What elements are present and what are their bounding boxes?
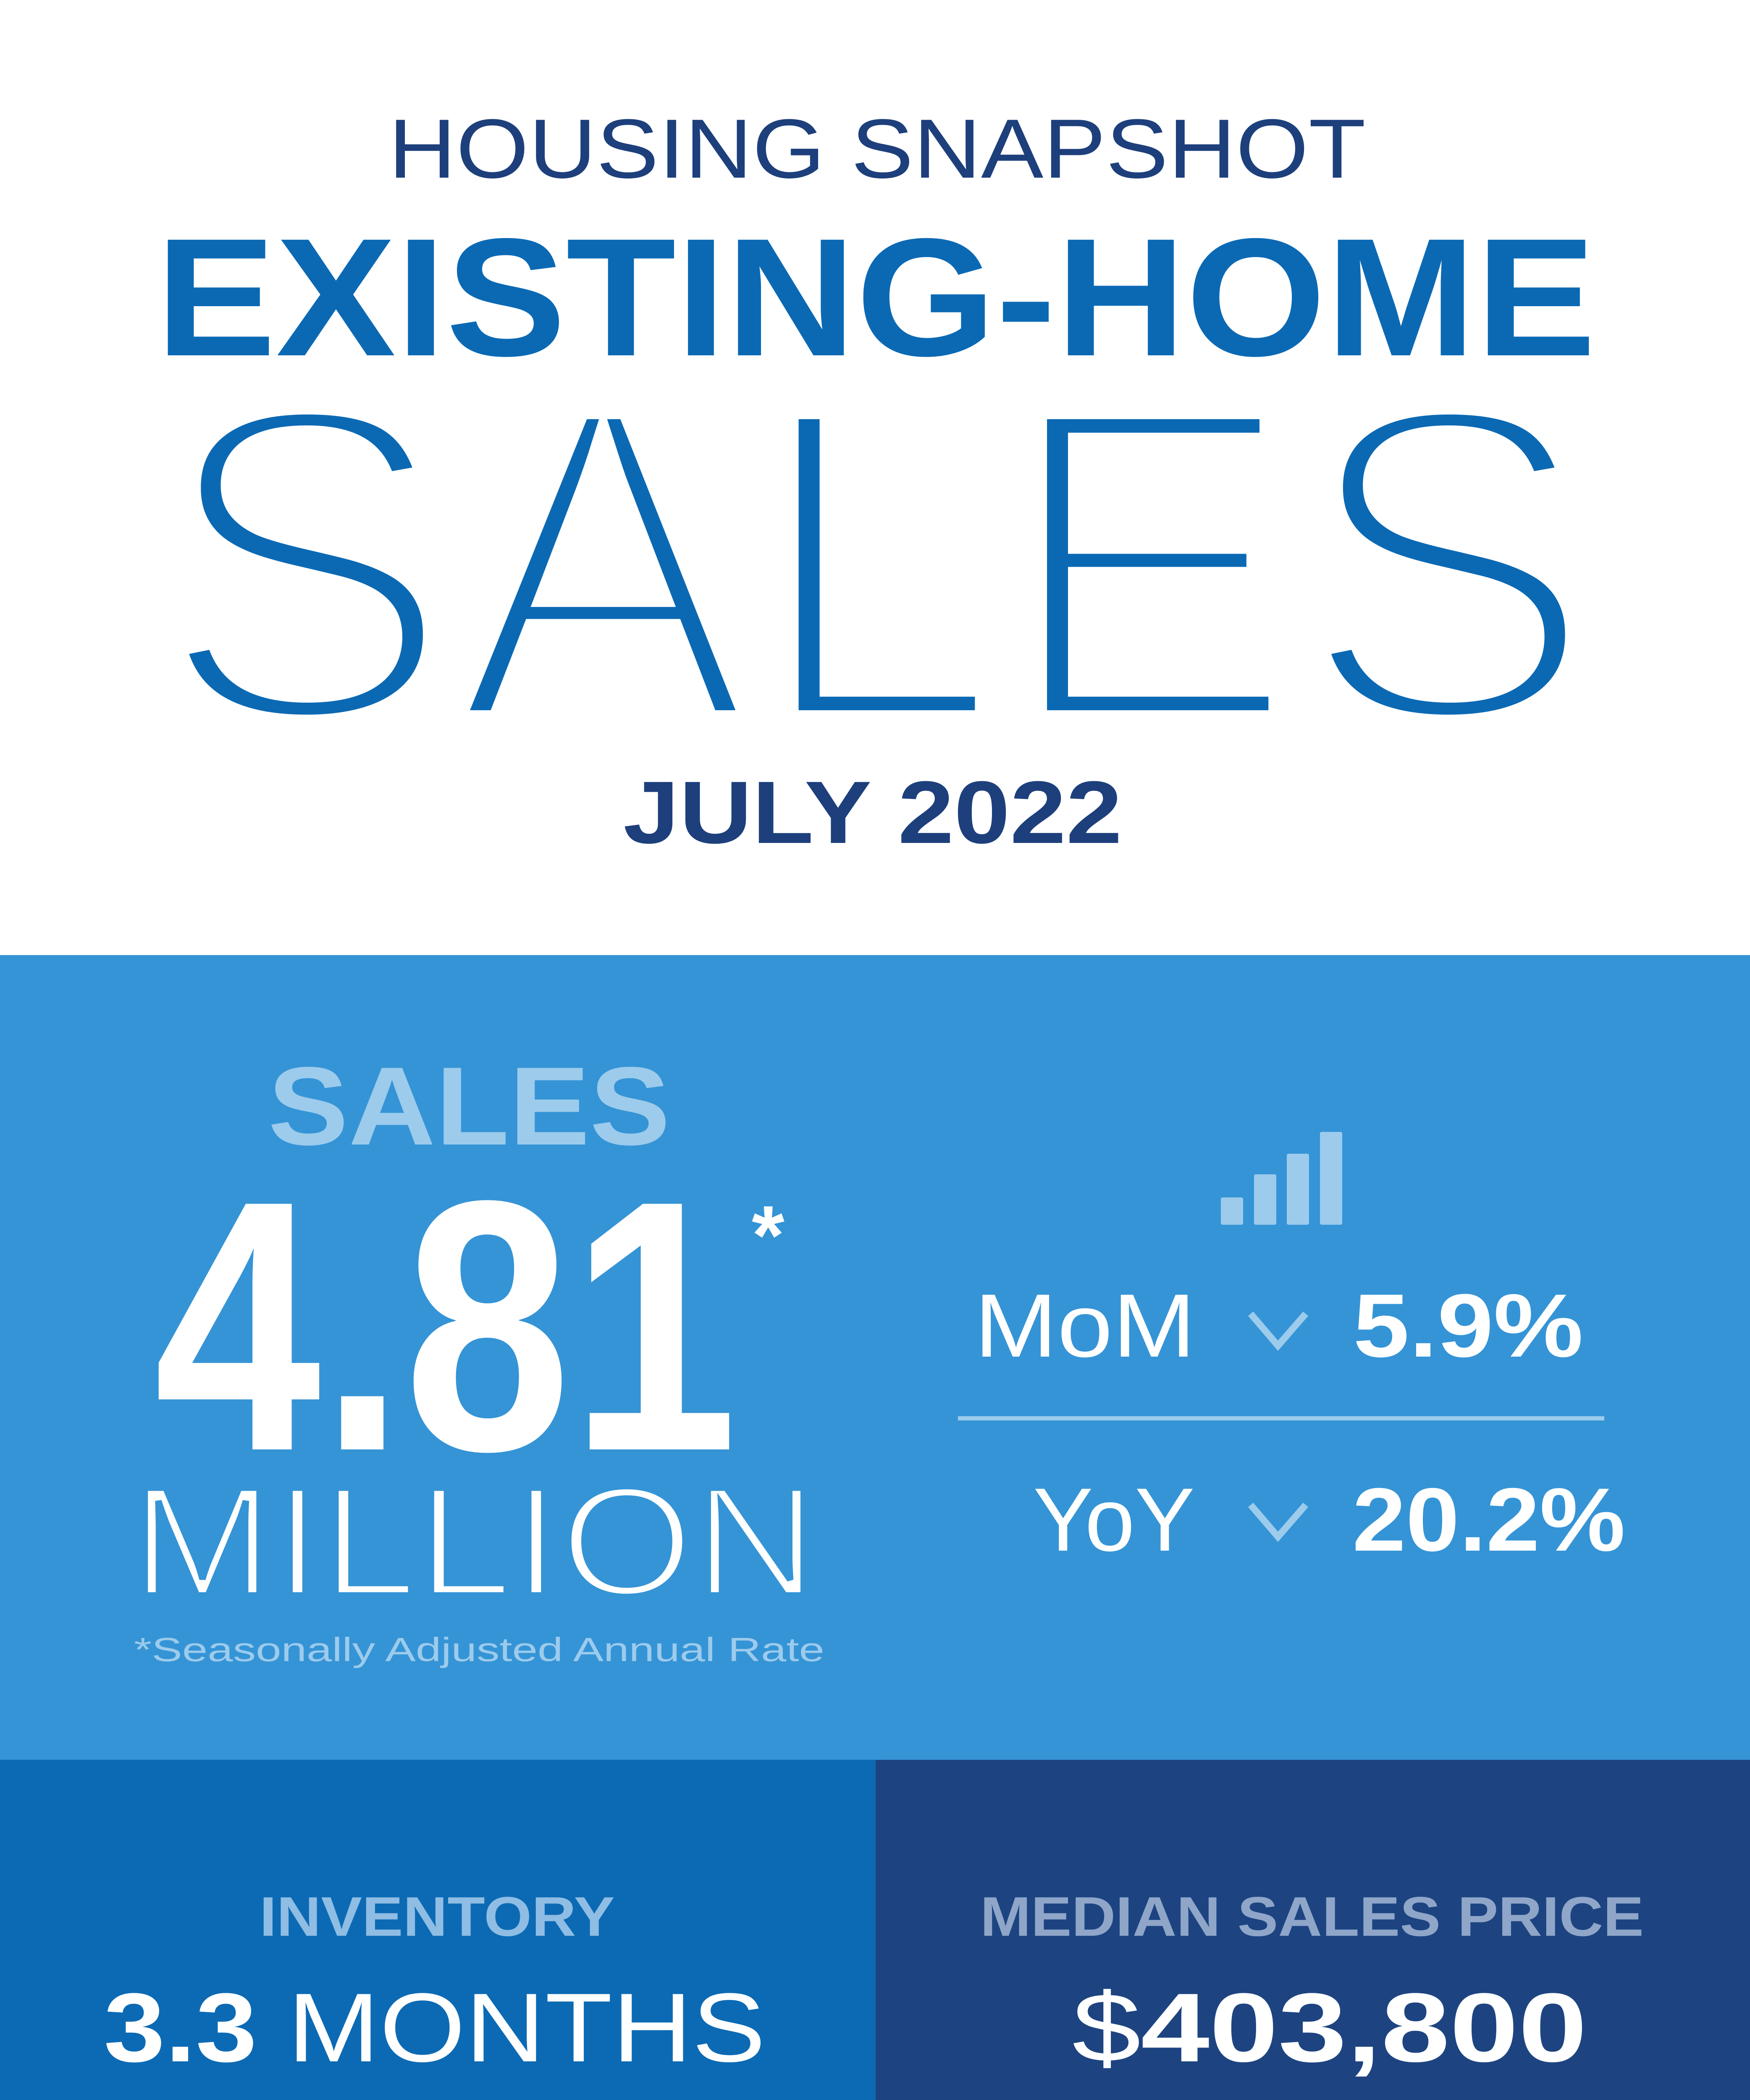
- title: housing snapshot: HOUSING SNAPSHOT: [388, 102, 1366, 196]
- price value: $403,800: [1072, 1973, 1587, 2082]
- stat: mom: MoM: [974, 1276, 1196, 1376]
- inventory value: 3.3 MONTHS: [104, 1973, 766, 2082]
- stat: yoy: 20.2%: [1352, 1470, 1625, 1570]
- inventory label: INVENTORY: [260, 1886, 615, 1948]
- price label: MEDIAN SALES PRICE: [980, 1886, 1644, 1948]
- sales label: SALES: [268, 1044, 670, 1168]
- stat: mom: 5.9%: [1353, 1276, 1583, 1376]
- header: [156, 102, 1596, 862]
- panel: inventory: [0, 1760, 876, 2100]
- date: july 2022: JULY 2022: [623, 763, 1122, 862]
- stat: yoy: YoY: [1033, 1470, 1195, 1570]
- icon: bar chart: [1221, 1132, 1342, 1225]
- stat: yoy: [1033, 1470, 1625, 1570]
- footnote: *Seasonally Adjusted Annual Rate: [134, 1631, 824, 1668]
- panel: sales: [0, 955, 1750, 1760]
- sales number 4.81: 4.81: [154, 1127, 737, 1525]
- million label: MILLION: [131, 1454, 818, 1628]
- title: sales (thin): SALES: [156, 310, 1596, 817]
- asterisk: *: [752, 1189, 784, 1282]
- panel: median sales price: [876, 1760, 1750, 2100]
- stat: mom: [974, 1276, 1583, 1376]
- title: existing-home: EXISTING-HOME: [156, 203, 1596, 391]
